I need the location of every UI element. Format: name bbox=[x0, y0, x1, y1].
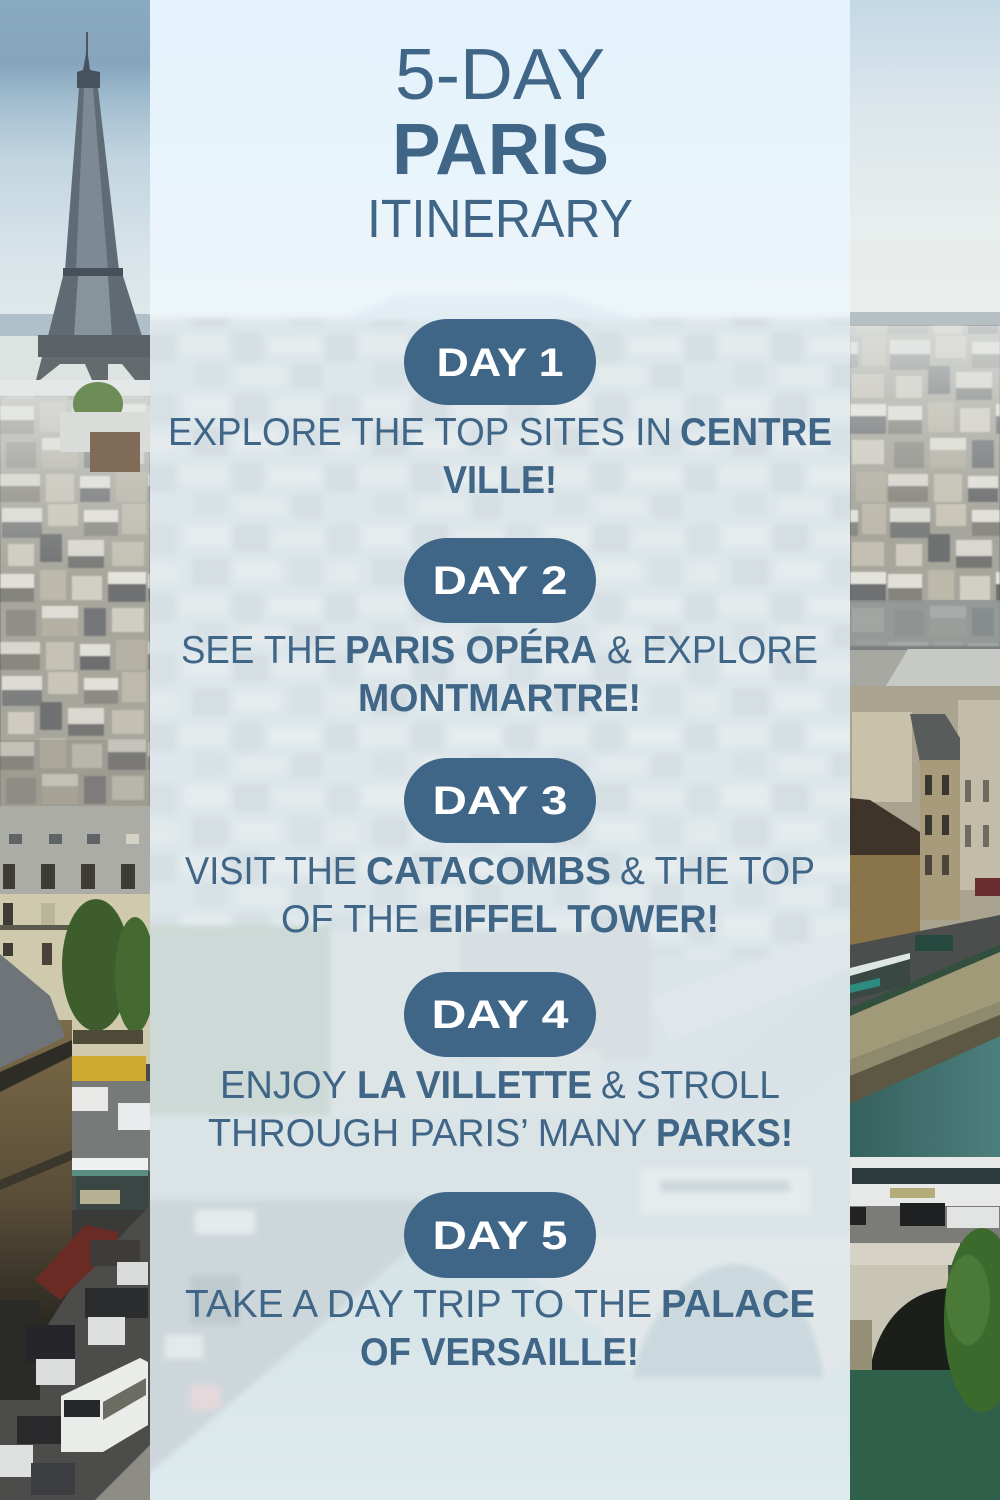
day 3 text: & THE TOP bbox=[620, 850, 815, 893]
stone bridge bbox=[850, 1243, 960, 1370]
day 1 badge bbox=[404, 319, 596, 405]
day 5 badge: DAY 5 bbox=[432, 1214, 568, 1258]
road and cars bbox=[850, 1203, 1000, 1243]
day 3 badge bbox=[404, 758, 596, 843]
day 5 badge bbox=[404, 1192, 596, 1278]
title: 5-DAY bbox=[395, 35, 605, 115]
central translucent panel bbox=[130, 0, 870, 1500]
corner building with dome bbox=[0, 954, 72, 1340]
day 5 text: OF VERSAILLE! bbox=[360, 1331, 639, 1374]
day 2 badge: DAY 2 bbox=[432, 559, 568, 603]
day 1 text: EXPLORE THE TOP SITES IN bbox=[168, 411, 672, 454]
day 3 text: OF THE bbox=[281, 898, 419, 941]
road and traffic bbox=[0, 1205, 150, 1500]
day 2 text: & EXPLORE bbox=[607, 629, 818, 672]
day 3 text: VISIT THE bbox=[185, 850, 357, 893]
right photo strip bbox=[850, 0, 1000, 1500]
day 4 badge bbox=[404, 972, 596, 1057]
trees bbox=[62, 899, 155, 1044]
green bus bbox=[850, 953, 910, 1000]
day 2 badge bbox=[404, 538, 596, 623]
river bbox=[850, 1036, 1000, 1160]
icon: Eiffel Tower bbox=[36, 32, 150, 380]
day 1 text: CENTRE bbox=[680, 411, 832, 454]
title bbox=[367, 35, 633, 249]
parisian building bbox=[0, 806, 150, 1064]
day 4 text: ENJOY bbox=[220, 1064, 347, 1107]
day 5 text: TAKE A DAY TRIP TO THE bbox=[185, 1283, 652, 1326]
day 4 text: THROUGH PARIS’ MANY bbox=[208, 1112, 647, 1155]
day 4 text: & STROLL bbox=[601, 1064, 780, 1107]
day 4 text: PARKS! bbox=[656, 1112, 793, 1155]
left photo strip bbox=[0, 0, 155, 1500]
day 2 text: PARIS OPÉRA bbox=[345, 628, 597, 672]
awning bbox=[66, 1056, 146, 1081]
day 3 text bbox=[185, 850, 815, 941]
day 5 text bbox=[185, 1283, 815, 1374]
tree on the bridge bbox=[944, 1228, 1000, 1412]
day 1 text bbox=[168, 411, 832, 502]
white bus bbox=[850, 1157, 1000, 1206]
day 4 text bbox=[208, 1064, 793, 1155]
tree near tower bbox=[73, 382, 123, 426]
day 2 text: SEE THE bbox=[181, 629, 337, 672]
day 1 badge: DAY 1 bbox=[436, 341, 564, 385]
title: ITINERARY bbox=[367, 189, 633, 249]
day 3 text: EIFFEL TOWER! bbox=[428, 898, 719, 941]
street bbox=[70, 1081, 150, 1210]
day 2 text: MONTMARTRE! bbox=[358, 677, 641, 720]
water under bridge bbox=[850, 1365, 1000, 1500]
day 4 badge: DAY 4 bbox=[432, 993, 569, 1037]
day 4 text: LA VILLETTE bbox=[357, 1064, 592, 1107]
day 5 text: PALACE bbox=[661, 1283, 815, 1326]
day 2 text bbox=[181, 628, 818, 720]
day 3 text: CATACOMBS bbox=[366, 850, 611, 893]
title: PARIS bbox=[392, 110, 609, 190]
day 3 badge: DAY 3 bbox=[432, 779, 568, 823]
river wall bbox=[850, 944, 1000, 1060]
day 1 text: VILLE! bbox=[443, 459, 557, 502]
